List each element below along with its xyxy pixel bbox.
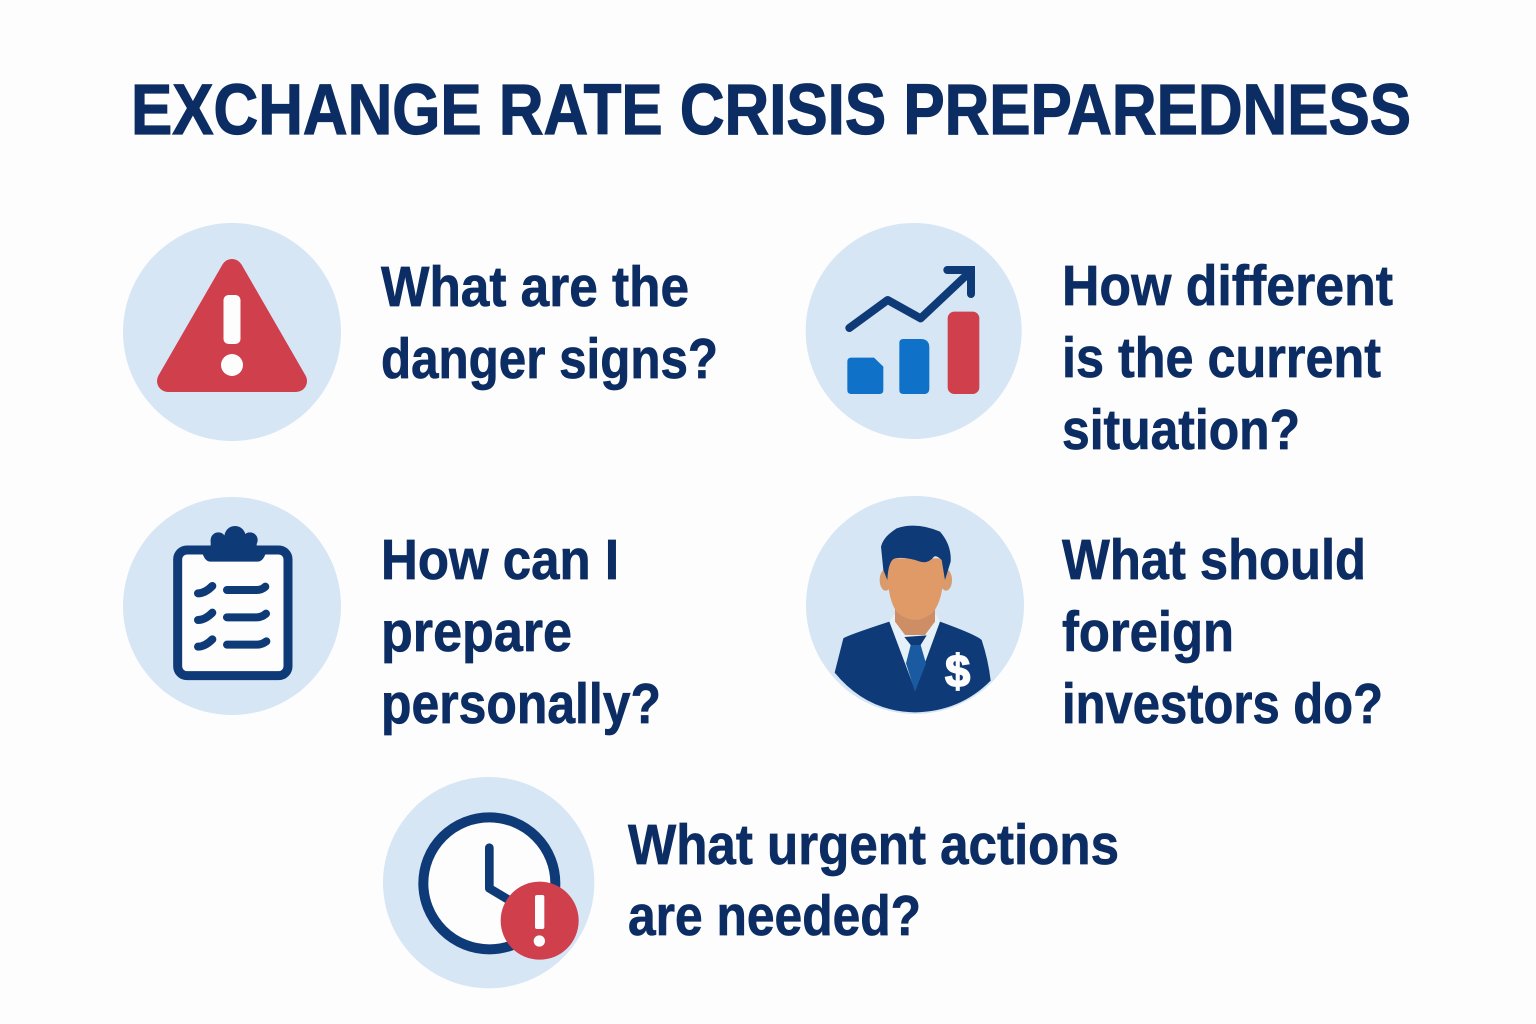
icon: investor: $ [945, 646, 970, 697]
question: current situation: is the current [1062, 326, 1381, 390]
question: personal preparation: prepare [381, 600, 572, 664]
question: foreign investors: investors do? [1062, 672, 1383, 736]
question: personal preparation: How can I [381, 528, 619, 592]
question: urgent actions: are needed? [628, 884, 921, 948]
icon: investor [806, 496, 1024, 714]
icon: clock with alert [383, 777, 594, 988]
question: current situation: How different [1062, 254, 1393, 318]
icon: clipboard checklist [123, 497, 341, 715]
question: danger signs: danger signs? [381, 327, 718, 391]
icon: rising chart [806, 223, 1022, 439]
panel: personal preparation [123, 497, 661, 736]
panel: urgent actions [383, 777, 1119, 988]
question: personal preparation: personally? [381, 672, 661, 736]
panel: foreign investors [806, 496, 1383, 736]
question: current situation: situation? [1062, 398, 1300, 462]
question: foreign investors: What should [1062, 528, 1366, 592]
question: urgent actions: What urgent actions [628, 813, 1119, 877]
question: foreign investors: foreign [1062, 600, 1234, 664]
panel: current situation [806, 223, 1393, 462]
question: danger signs: What are the [381, 255, 689, 319]
panel: danger signs [123, 223, 718, 441]
icon: warning triangle [123, 223, 341, 441]
